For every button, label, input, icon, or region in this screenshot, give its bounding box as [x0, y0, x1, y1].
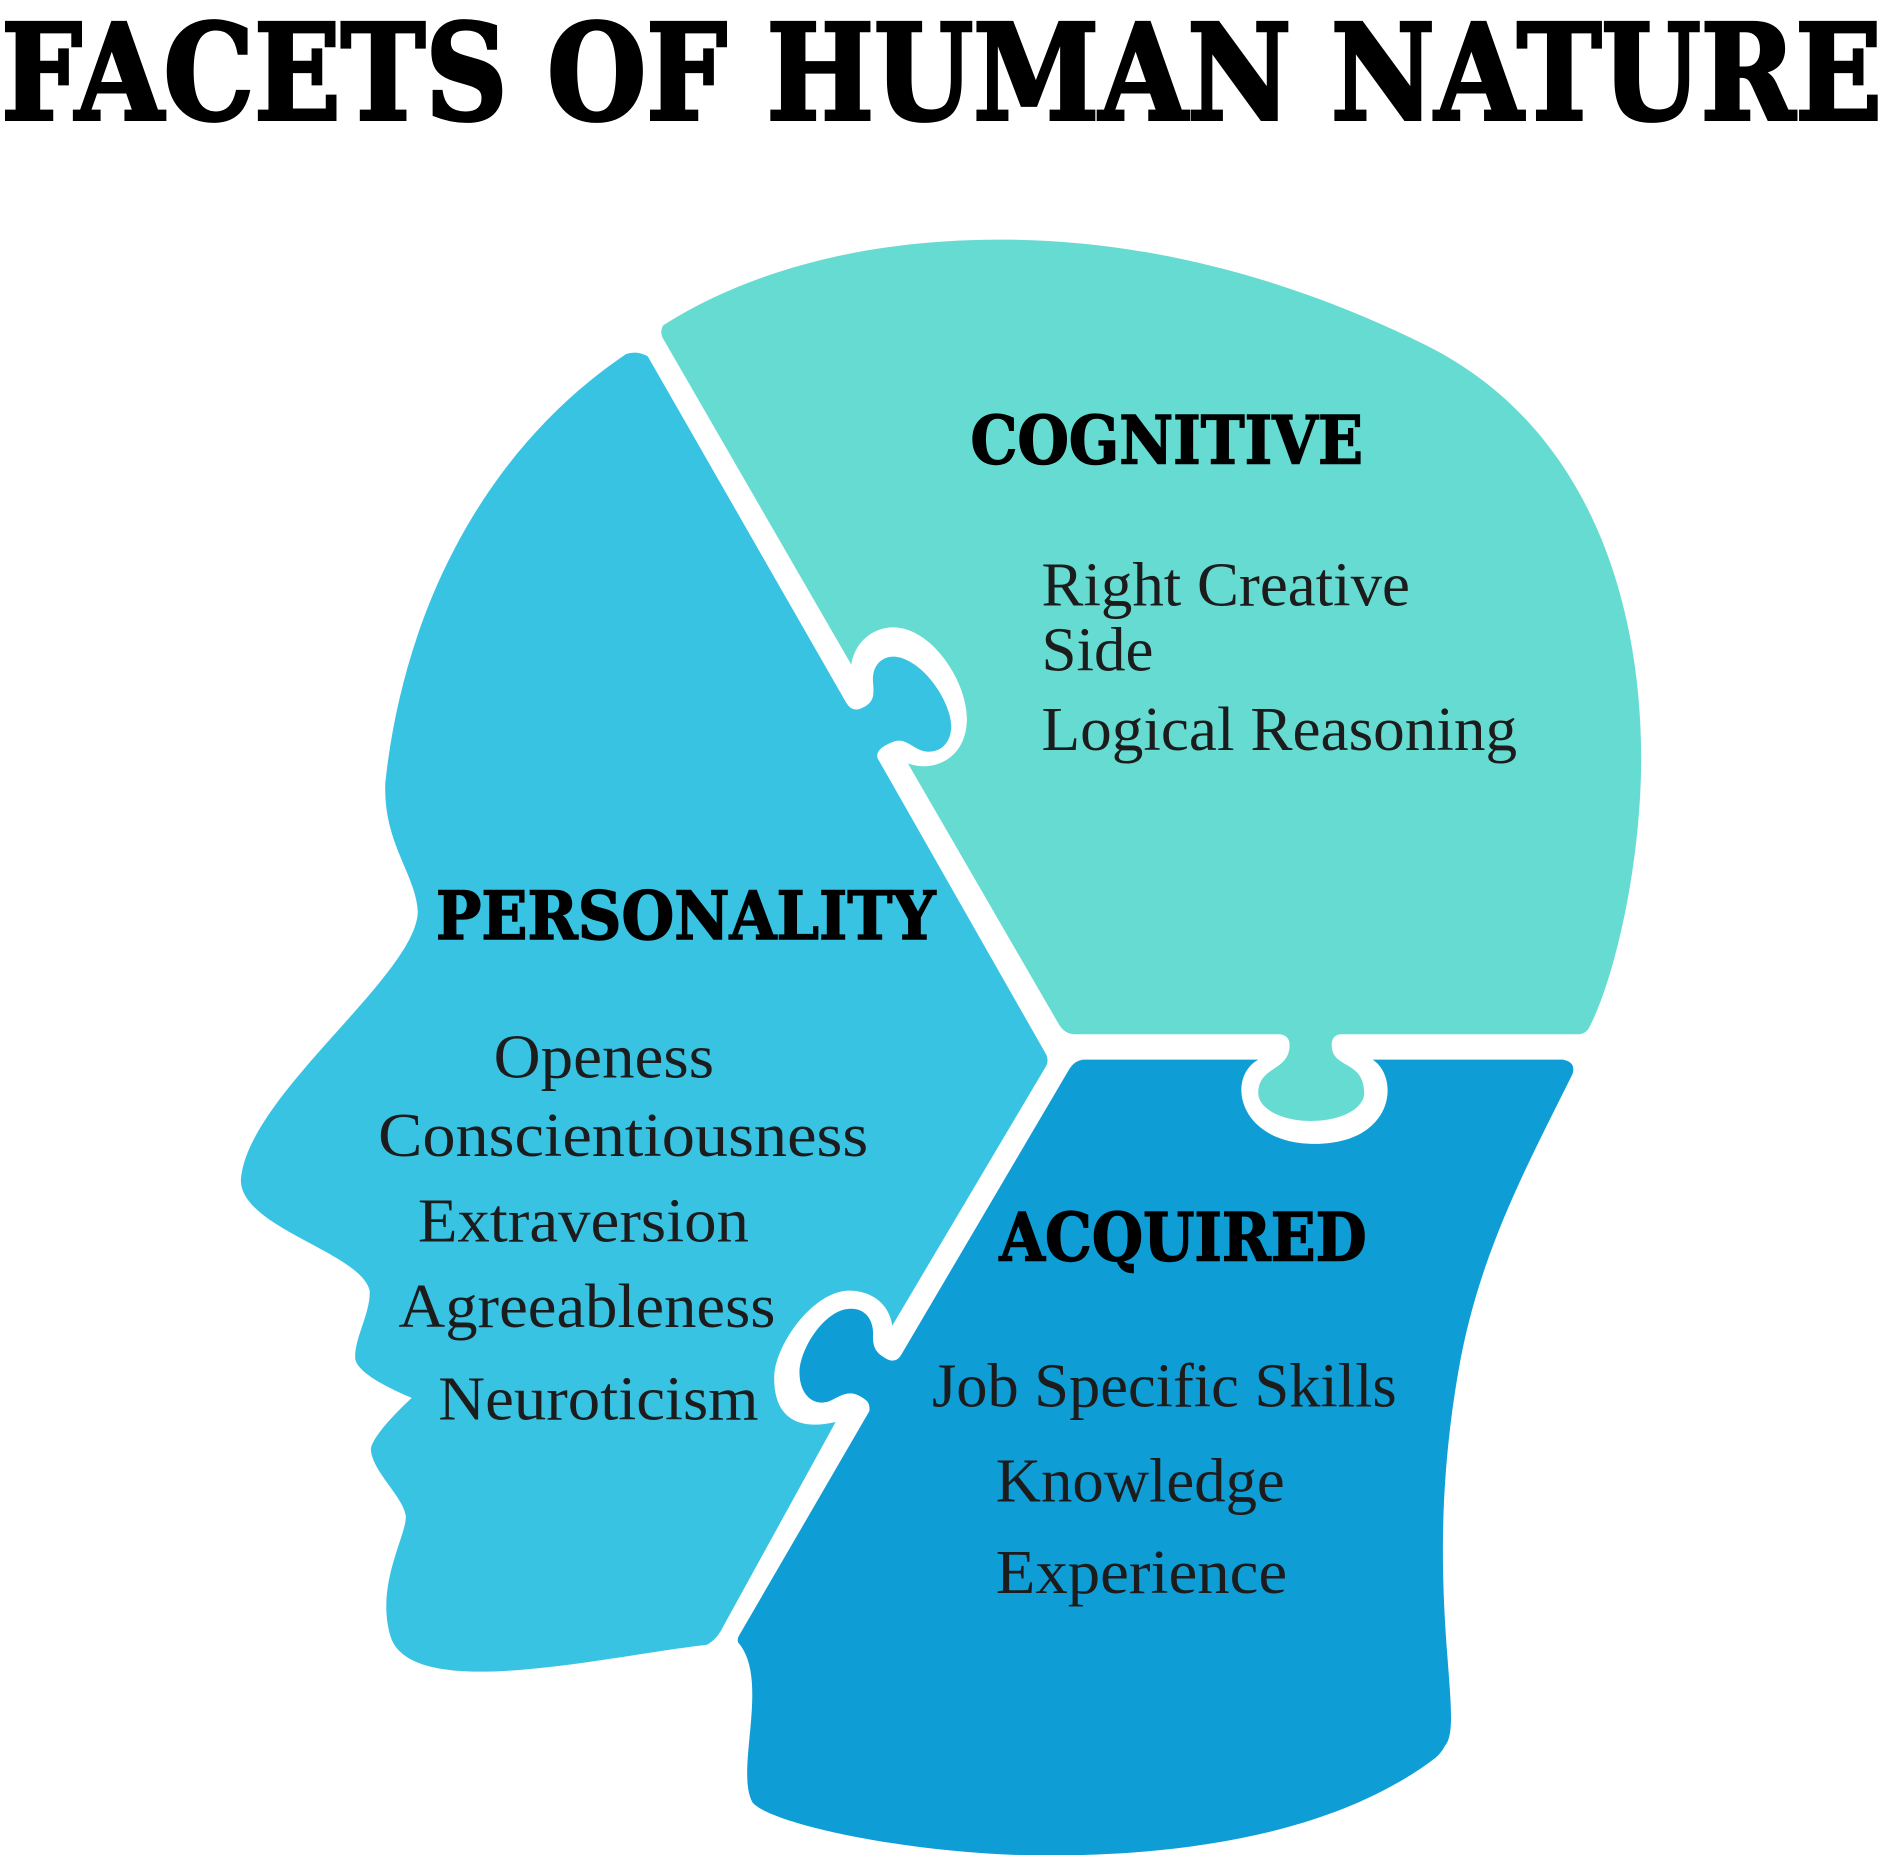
acquired heading: ACQUIRED — [998, 1199, 1367, 1277]
acquired list: Experience — [996, 1537, 1287, 1607]
cognitive puzzle piece — [661, 240, 1641, 1121]
acquired list: Knowledge — [996, 1445, 1285, 1515]
panel: acquired — [738, 1060, 1573, 1855]
personality list — [378, 1022, 868, 1434]
panel: cognitive — [661, 240, 1641, 1121]
personality list: Agreeableness — [399, 1271, 775, 1341]
personality list: Conscientiousness — [378, 1100, 868, 1170]
personality list: Neuroticism — [438, 1364, 759, 1434]
cognitive list — [1042, 550, 1517, 764]
cognitive heading: COGNITIVE — [970, 402, 1363, 480]
personality list: Openess — [494, 1022, 714, 1092]
acquired puzzle piece — [738, 1060, 1573, 1855]
personality heading: PERSONALITY — [436, 877, 936, 955]
cognitive list: Logical Reasoning — [1042, 694, 1517, 764]
cognitive list: Right Creative — [1042, 550, 1410, 620]
personality puzzle piece — [241, 353, 1048, 1672]
personality list: Extraversion — [418, 1185, 749, 1255]
panel: personality — [241, 353, 1048, 1672]
cognitive list: Side — [1042, 615, 1154, 685]
acquired list — [932, 1350, 1397, 1607]
acquired list: Job Specific Skills — [932, 1350, 1397, 1420]
